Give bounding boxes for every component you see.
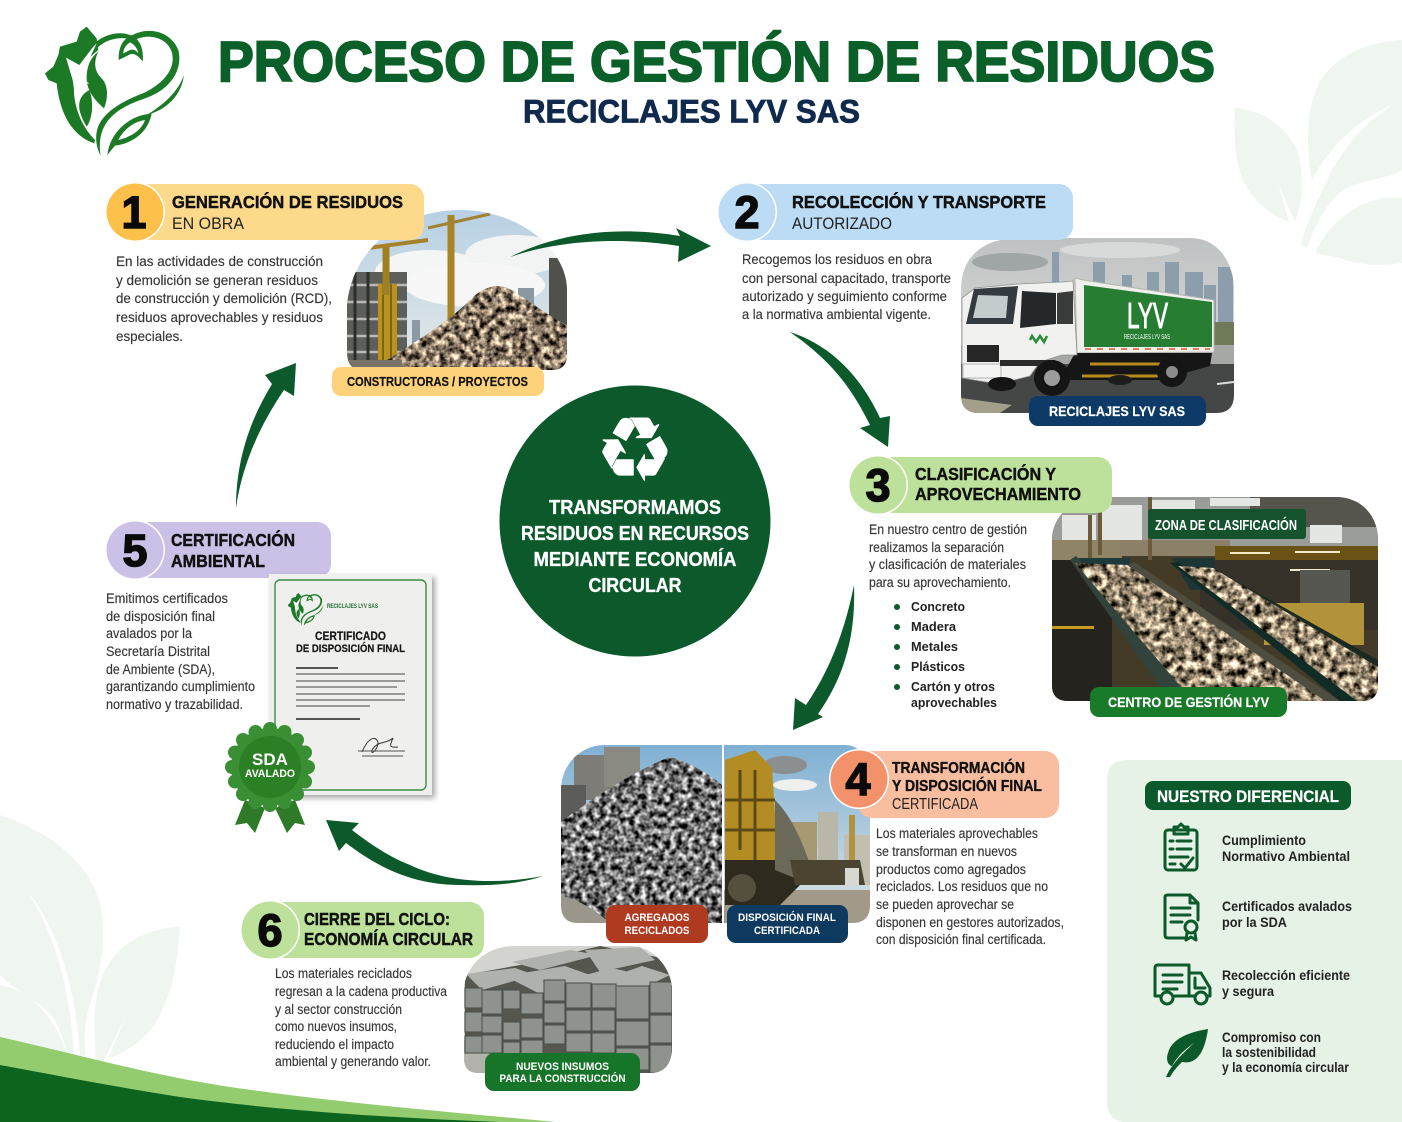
text: compromiso: la sostenibilidad [1222,1045,1316,1060]
step 3 text: y clasificación de materiales [869,557,1026,572]
step 1 header: EN OBRA [172,214,245,233]
title: PROCESO DE GESTIÓN DE RESIDUOS [218,30,1215,94]
step 2 text [742,251,951,322]
step 5 text: normativo y trazabilidad. [106,697,243,712]
text: compromiso: Compromiso con [1222,1030,1321,1045]
label: zona de clasificacion: ZONA DE CLASIFICACIÓN [1155,516,1297,534]
step 4 text: reciclados. Los residuos que no [876,879,1048,894]
step 2 header: AUTORIZADO [792,214,892,233]
step 3 header [848,455,1112,515]
certificate [269,574,432,795]
step 5 text: Secretaría Distrital [106,644,210,659]
step 5 header: AMBIENTAL [171,551,265,571]
arrow: 4 to 5 [326,820,543,885]
step 3 material list [894,599,997,710]
panel heading: NUESTRO DIFERENCIAL [1157,787,1339,806]
step 4 header: TRANSFORMACIÓN [892,759,1025,777]
center circle: CIRCULAR [588,575,682,597]
label: zona de clasificacion [1148,509,1306,539]
text: cumplimiento: Cumplimiento [1222,833,1306,848]
text: cumplimiento [1222,833,1350,864]
certificate: CERTIFICADO [315,631,386,643]
step 4 header [829,749,1059,818]
panel: nuestro diferencial [1107,760,1402,1122]
text: certificados: Certificados avalados [1222,899,1352,914]
icon: truck [1155,965,1210,1004]
step 5 header: 5 [122,525,148,576]
step 6 header: CIERRE DEL CICLO: [304,909,450,929]
text: compromiso: y la economía circular [1222,1060,1350,1075]
center circle [500,386,770,656]
photo: final disposal [724,745,870,923]
step 3 text: para su aprovechamiento. [869,575,1011,590]
step 5 text: de Ambiente (SDA), [106,662,215,677]
seal: sda avalado [225,722,315,833]
arrow: 1 to 2 [510,228,711,262]
label: nuevos insumos: PARA LA CONSTRUCCIÓN [500,1072,626,1085]
step 4 header: CERTIFICADA [892,796,979,813]
step 6 text: y al sector construcción [275,1002,402,1017]
photo: concrete blocks [464,946,672,1073]
step 1 text: y demolición se generan residuos [116,272,318,288]
step 3 text: realizamos la separación [869,540,1004,555]
text: recoleccion: Recolección eficiente [1222,968,1350,983]
step 4 text: se transforman en nuevos [876,844,1017,859]
step 6 header: ECONOMÍA CIRCULAR [304,928,473,949]
step 3 header: APROVECHAMIENTO [915,484,1081,504]
bottom swoosh [0,1037,556,1122]
label: nuevos insumos [485,1053,640,1091]
step 3 material list: aprovechables [911,695,997,710]
label: agregados: RECICLADOS [624,925,690,937]
step 4 text: Los materiales aprovechables [876,826,1038,841]
logo [45,27,184,156]
photo: sorting plant [1052,497,1378,701]
text: cumplimiento: Normativo Ambiental [1222,849,1350,864]
panel heading [1145,781,1351,810]
step 4 text [876,826,1064,947]
step 4 text: con disposición final certificada. [876,932,1046,947]
step 3 material list: Cartón y otros [911,679,995,694]
step 1 text [116,253,332,344]
step 1 text: En las actividades de construcción [116,253,323,269]
step 5 text: Emitimos certificados [106,591,228,606]
certificate: DE DISPOSICIÓN FINAL [296,642,405,655]
center circle: TRANSFORMAMOS [549,497,721,519]
label: disposicion final: CERTIFICADA [754,925,820,937]
background leaves: bottom left [0,815,180,1062]
step 6 header: 6 [257,905,283,956]
center circle: MEDIANTE ECONOMÍA [534,548,736,571]
photo: construction site [347,210,567,370]
step 5 text: garantizando cumplimiento [106,679,255,694]
label: reciclajes lyv sas: RECICLAJES LYV SAS [1049,403,1185,419]
step 2 text: autorizado y seguimiento conforme [742,288,947,304]
text: compromiso [1222,1030,1350,1075]
step 1 header [105,182,424,242]
label: nuevos insumos: NUEVOS INSUMOS [516,1061,609,1073]
step 1 text: residuos aprovechables y residuos [116,309,323,325]
step 3 header: 3 [865,460,891,511]
icon: certificate document [1165,895,1198,940]
label: disposicion final [727,905,848,943]
step 3 material list: Madera [911,619,957,634]
seal: sda avalado: SDA [252,750,288,769]
step 4 header: 4 [845,754,871,805]
step 1 text: de construcción y demolición (RCD), [116,290,332,306]
center circle: RESIDUOS EN RECURSOS [521,523,749,545]
arrow: 3 to 4 [793,585,854,730]
step 2 header: RECOLECCIÓN Y TRANSPORTE [792,191,1046,212]
label: disposicion final: DISPOSICIÓN FINAL [738,911,836,924]
text: recoleccion [1222,968,1350,999]
step 5 text: de disposición final [106,609,215,624]
step 2 header: 2 [734,187,760,238]
step 3 material list: Metales [911,639,958,654]
step 5 text: avalados por la [106,626,192,641]
step 2 text: con personal capacitado, transporte [742,270,951,286]
text: recoleccion: y segura [1222,984,1274,999]
icon: leaf [1166,1029,1208,1077]
step 3 material list: Plásticos [911,659,965,674]
step 1 header: GENERACIÓN DE RESIDUOS [172,191,403,212]
background leaves: top right [1234,40,1402,265]
icon: clipboard [1165,824,1197,870]
text: certificados [1222,899,1352,930]
step 6 text [275,966,447,1069]
label: agregados: AGREGADOS [624,912,690,924]
step 6 text: como nuevos insumos, [275,1019,397,1034]
label: centro de gestion [1090,687,1287,717]
photo: truck [961,238,1234,413]
seal: sda avalado: AVALADO [245,768,295,780]
certificate: RECICLAJES LYV SAS [327,603,378,610]
step 3 text: En nuestro centro de gestión [869,522,1027,537]
icon: recycle: ♻ [596,398,674,501]
step 6 text: regresan a la cadena productiva [275,984,447,999]
title [218,30,1215,130]
step 3 text [869,522,1027,590]
step 4 text: productos como agregados [876,862,1026,877]
step 4 text: disponen en gestores autorizados, [876,915,1064,930]
step 2 header [717,182,1073,242]
label: constructoras [332,367,544,396]
step 5 header [105,520,331,580]
label: constructoras: CONSTRUCTORAS / PROYECTOS [347,375,528,389]
label: agregados [606,905,708,943]
step 6 text: Los materiales reciclados [275,966,412,981]
step 4 text: se pueden aprovechar se [876,897,1014,912]
step 2 text: Recogemos los residuos en obra [742,251,932,267]
step 6 text: reduciendo el impacto [275,1037,394,1052]
arrow: 5 to 1 [236,363,296,508]
label: reciclajes lyv sas [1029,396,1206,426]
step 4 header: Y DISPOSICIÓN FINAL [892,777,1042,795]
photo: truck: LYV [1127,295,1168,336]
step 1 header: 1 [121,187,147,238]
step 1 text: especiales. [116,328,183,344]
step 2 text: a la normativa ambiental vigente. [742,306,931,322]
arrow: 2 to 3 [790,332,890,447]
photo: recycled aggregates [561,745,722,923]
step 6 text: ambiental y generando valor. [275,1054,431,1069]
label: centro de gestion: CENTRO DE GESTIÓN LYV [1108,693,1270,710]
step 6 header [240,900,484,960]
step 3 material list: Concreto [911,599,965,614]
subtitle: RECICLAJES LYV SAS [523,94,860,130]
step 3 header: CLASIFICACIÓN Y [915,463,1056,484]
step 5 text [106,591,255,712]
photo: truck: RECICLAJES LYV SAS [1124,334,1170,341]
step 5 header: CERTIFICACIÓN [171,529,295,550]
text: certificados: por la SDA [1222,915,1287,930]
